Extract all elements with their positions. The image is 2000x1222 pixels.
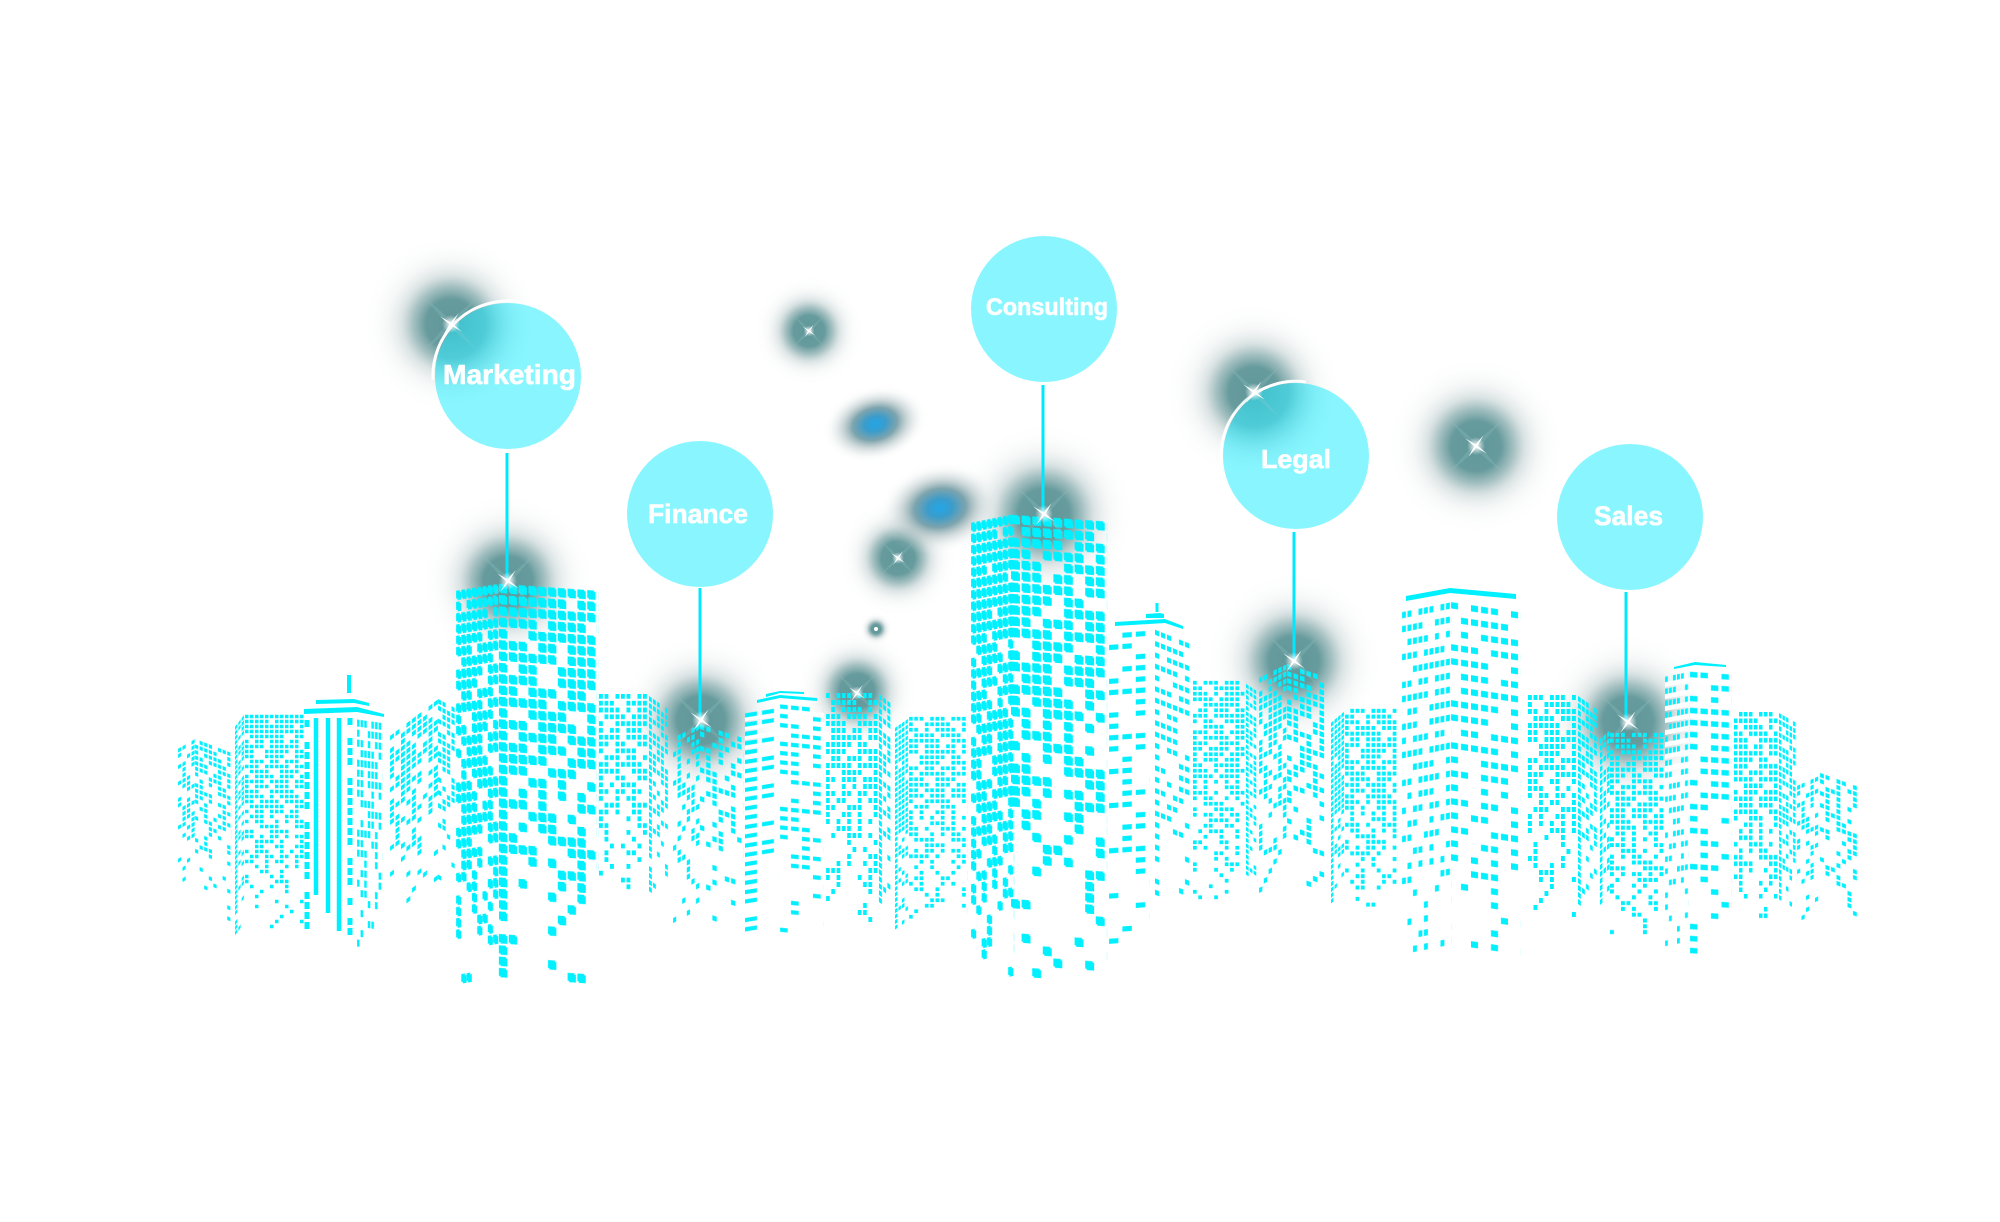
building: spire tower with vertical stripes [304,675,384,952]
light glows behind skyline [361,234,1718,812]
building: block below Finance left [599,693,669,906]
building: angled block [390,697,456,917]
node: Marketing [432,300,581,449]
node: Consulting: Consulting [986,294,1108,321]
building: tower right of Sales [1665,662,1732,961]
node: Finance: Finance [648,499,748,529]
infographic: city skyline with department nodes [178,236,1858,984]
building: far left block [178,738,232,923]
building: roofed block with small spire [1109,603,1191,960]
building: block under small glow [826,692,892,923]
node: Sales [1557,444,1703,590]
building: dense small grid block [235,713,305,936]
building: grid block below Sales [1600,729,1665,935]
node: Legal: Legal [1261,444,1331,474]
connector lines [507,385,1626,721]
building: block left of second tower [895,716,967,930]
building: tall tower below Marketing [456,582,598,986]
building: small grid block right of Legal [1331,708,1398,908]
sparkle stars [425,298,1654,748]
building: tallest tower below Consulting [971,513,1108,986]
building: small grid block left of Legal [1193,680,1257,900]
node: Marketing: Marketing [443,359,576,390]
node: Legal [1220,380,1369,529]
building: wide striped tower [1402,588,1521,960]
building: far right low block [1797,772,1858,924]
node: Finance [627,441,773,587]
building: block below Finance [673,723,743,931]
node: Sales: Sales [1594,501,1663,531]
building: grid block near right edge [1734,711,1796,919]
node: Consulting [971,236,1117,382]
building: block below Legal [1259,663,1326,935]
building: grid block left of Sales [1528,694,1598,926]
building: wide window block [745,691,824,949]
